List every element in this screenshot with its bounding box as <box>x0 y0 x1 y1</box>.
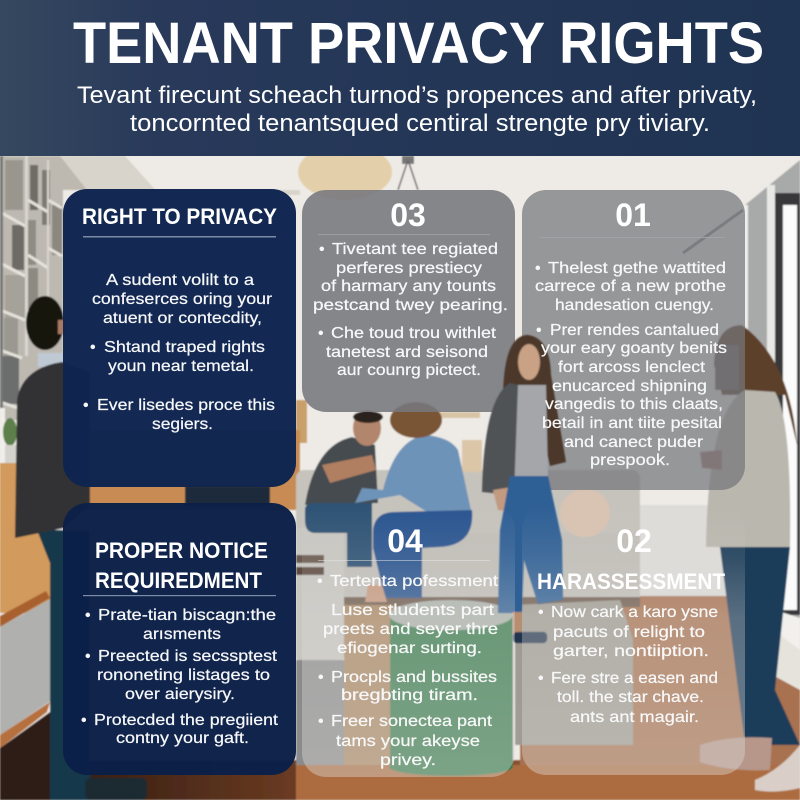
subtitle: Tevant firecunt scheach turnod’s propences and after privaty, <box>77 82 757 109</box>
text block: 04: Procpls and bussites <box>331 669 497 686</box>
lamp <box>298 144 418 200</box>
text block: 04: • <box>317 573 323 590</box>
text block: right to privacy: segiers. <box>152 416 213 433</box>
text block: 04 <box>317 573 499 769</box>
panel: proper notice <box>63 503 296 775</box>
window <box>745 160 800 640</box>
text block: 03: perferes prestiecy <box>336 260 482 277</box>
number 03: 03 <box>390 197 426 233</box>
sofa <box>296 470 640 765</box>
text block: 03: of harmary any tounts <box>321 278 496 295</box>
person: man on sofa <box>305 410 383 567</box>
text block: 03: Che toud trou withlet <box>331 325 497 342</box>
heading: harassessment: HARASSESSMENT <box>537 569 726 594</box>
text block: 02: Fere stre a easen and <box>551 670 718 687</box>
person: walking woman <box>482 335 566 643</box>
orange cabinet behind left panel <box>60 430 300 510</box>
panel: 04 <box>302 505 515 777</box>
person: standing woman at right <box>700 160 800 792</box>
text block: 01: handesation cuengy. <box>555 297 714 314</box>
text block: 01 <box>535 260 727 469</box>
text block: right to privacy: Shtand traped rights <box>104 339 265 356</box>
text block: right to privacy: atuent or contecdity, <box>103 310 262 327</box>
subtitle <box>77 82 757 137</box>
number 02: 02 <box>616 523 652 559</box>
text block: 04: privey. <box>380 752 436 769</box>
text block: 03: • <box>319 241 325 258</box>
text block: 04: Freer sonectea pant <box>331 713 493 730</box>
text block: right to privacy: Ever lisedes proce this <box>97 397 275 414</box>
green cylinder <box>389 600 513 776</box>
subtitle: toncornted tenantsqued centiral strengte pry tiviary. <box>130 110 710 137</box>
plant <box>0 408 18 466</box>
text block: 01: • <box>535 260 541 277</box>
cabinet <box>0 463 62 800</box>
text block: 04: tams your akeyse <box>336 733 480 750</box>
text block: 02: pacuts of relight to <box>553 624 705 641</box>
floor <box>50 760 800 800</box>
text block: 03 <box>313 241 508 379</box>
person: man at left <box>15 296 147 800</box>
text block: 01: Thelest gethe wattited <box>548 260 726 277</box>
text block: 04: bregbting tiram. <box>341 687 478 704</box>
shelf <box>428 412 480 418</box>
text block: 02: • <box>538 604 544 621</box>
text block: 04: • <box>318 669 324 686</box>
text block: proper notice: over aierysiry. <box>125 686 235 703</box>
text block: right to privacy: A sudent volilt to a <box>106 272 254 289</box>
text block: 01: prespook. <box>590 452 670 469</box>
text block: 02: ants ant magair. <box>570 709 699 726</box>
ceiling shading <box>60 156 300 195</box>
text block: 01: enucarced shipning <box>552 378 707 395</box>
header band <box>0 0 800 156</box>
text block: proper notice: Preected is secssptest <box>98 648 278 665</box>
text block: 02: Now cark a karo ysne <box>551 604 718 621</box>
text block: proper notice <box>81 607 279 747</box>
rug <box>515 600 633 745</box>
text block: 04: • <box>318 713 324 730</box>
right wall <box>620 505 745 596</box>
text block: 02: toll. the star chave. <box>557 689 704 706</box>
text block: 04: preets and seyer thre <box>323 621 498 638</box>
text block: 01: betail in ant tiite pesital <box>542 415 722 432</box>
text block: right to privacy: • <box>83 397 89 414</box>
text block: 04: Tertenta pofessment <box>330 573 499 590</box>
heading: right to privacy: RIGHT TO PRIVACY <box>82 204 277 229</box>
text block: 04: efiogenar surting. <box>337 640 482 657</box>
panel: 01 <box>482 190 745 643</box>
text block: 03: Tivetant tee regiated <box>332 241 498 258</box>
text block: 03: aur counrg pictect. <box>337 362 481 379</box>
text block: 01: vangedis to this claats, <box>545 396 723 413</box>
text block: 02: garter, nontiiption. <box>553 643 709 660</box>
text block: proper notice: contny your gaft. <box>116 730 249 747</box>
text block: 01: Prer rendes cantalued <box>550 322 719 339</box>
text block: proper notice: Protecded the pregiient <box>94 712 279 729</box>
text block: 01: fort arcoss lenclect <box>558 359 706 376</box>
text block: proper notice: • <box>85 648 91 665</box>
number 04: 04 <box>387 523 423 559</box>
panel: 03 <box>302 190 515 412</box>
text block: right to privacy <box>83 272 275 433</box>
text block: right to privacy: youn near temetal. <box>108 358 254 375</box>
text block: 03: • <box>318 325 324 342</box>
text block: 01: your eary goanty benits <box>541 340 727 357</box>
text block: proper notice: arısments <box>143 626 221 643</box>
text block: 04: Luse stludents part <box>331 602 495 619</box>
text block: 03: tanetest ard seisond <box>326 344 488 361</box>
text block: right to privacy: • <box>90 339 96 356</box>
text block: proper notice: • <box>81 712 87 729</box>
person: woman on sofa <box>355 402 472 602</box>
text block: proper notice: • <box>85 607 91 624</box>
text block: right to privacy: confeserces oring your <box>92 291 273 308</box>
title: TENANT PRIVACY RIGHTS <box>73 11 764 76</box>
number 01: 01 <box>615 197 651 233</box>
text block: 01: and canect puder <box>564 434 704 451</box>
heading: proper notice: PROPER NOTICE <box>95 538 268 563</box>
bookshelves <box>0 156 87 421</box>
text block: 02: • <box>538 670 544 687</box>
wood strip left of center <box>296 400 307 443</box>
text block: proper notice: Prate-tian biscagn:the <box>98 607 276 624</box>
text block: 02 <box>538 604 718 726</box>
text block: 03: pestcand twey pearing. <box>313 297 508 314</box>
text block: 01: carrece of a new prothe <box>535 278 726 295</box>
text block: proper notice: rononeting listages to <box>97 667 270 684</box>
heading: proper notice <box>95 538 268 593</box>
text block: 01: • <box>536 322 542 339</box>
panel: 02 harassessment <box>522 505 745 775</box>
heading: proper notice: REQUIREDMENT <box>95 568 263 593</box>
panel: right to privacy <box>63 189 296 487</box>
